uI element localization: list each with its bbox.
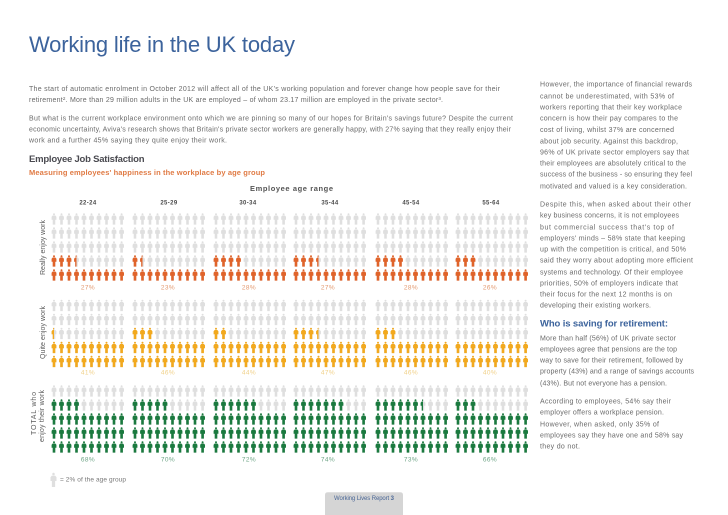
age range labels: 22-24 bbox=[79, 200, 97, 206]
right column: financial rewards text: their employees are absolutely critical to the bbox=[540, 160, 686, 167]
pictogram: quite enjoy work 30-34: 44% bbox=[242, 370, 256, 376]
right column: saving text: (43%). But not everyone has a pension. bbox=[540, 381, 667, 388]
pictogram: total who enjoy work 35-44: 74% bbox=[321, 456, 335, 464]
row label: total who enjoy their work bbox=[31, 390, 46, 442]
age range labels: 30-34 bbox=[239, 200, 257, 206]
right column: financial rewards text: cannot be underestimated, with 53% of bbox=[540, 93, 674, 100]
intro text block: But what is the current workplace environment onto which we are pinning so many of our hopes for Britain's savings future? Despite the current bbox=[29, 116, 513, 122]
chart heading: Employee Job Satisfaction bbox=[29, 154, 145, 165]
pictogram: total who enjoy work 25-29: 70% bbox=[161, 456, 175, 464]
pictogram: quite enjoy work 35-44 bbox=[294, 300, 366, 376]
pictogram: really enjoy work 25-29: 23% bbox=[161, 284, 175, 292]
pictogram: quite enjoy work 45-54 bbox=[376, 300, 448, 376]
right column: financial rewards text: However, the importance of financial rewards bbox=[540, 82, 692, 89]
legend bbox=[50, 473, 126, 487]
pictogram: really enjoy work 55-64: 26% bbox=[483, 284, 497, 292]
right column: business concerns text: priorities, 50% of employers indicate that bbox=[540, 281, 678, 288]
pictogram: quite enjoy work 55-64: 40% bbox=[483, 370, 497, 376]
axis title: employee age range: Employee age range bbox=[250, 184, 333, 193]
right column: business concerns text: but commercial success that's top of bbox=[540, 224, 674, 231]
right column: pension text: According to employees, 54% say their bbox=[540, 399, 672, 406]
right column: saving text: More than half (56%) of UK private sector bbox=[540, 336, 677, 343]
right column: financial rewards text bbox=[539, 82, 692, 190]
intro text block: retirement². More than 29 million adults in the UK are employed – of whom 23.17 million are employed in the private sector³. bbox=[29, 97, 443, 104]
pictogram: total who enjoy work 55-64: 66% bbox=[483, 456, 497, 464]
right column heading: who is saving for retirement: Who is saving for retirement: bbox=[540, 318, 668, 329]
right column: business concerns text bbox=[540, 202, 693, 310]
pictogram: total who enjoy work 35-44 bbox=[294, 385, 366, 464]
right column: saving text: property (43%) and a range of savings accounts bbox=[540, 369, 694, 376]
right column: pension text: they do not. bbox=[540, 444, 580, 451]
right column: business concerns text: their focus for the next 12 months is on bbox=[540, 292, 672, 299]
footer tab bbox=[325, 492, 403, 515]
right column: saving text: way to save for their retirement, followed by bbox=[539, 358, 684, 365]
right column: pension text: employees say they have one and 58% say bbox=[540, 433, 684, 440]
age range labels: 45-54 bbox=[402, 200, 420, 206]
pictogram: really enjoy work 22-24 bbox=[52, 213, 124, 292]
right column: financial rewards text: 96% of UK private sector employers say that bbox=[540, 149, 689, 156]
pictogram: quite enjoy work 55-64 bbox=[456, 300, 528, 376]
pictogram: quite enjoy work 45-54: 46% bbox=[404, 370, 418, 376]
pictogram: total who enjoy work 55-64 bbox=[456, 385, 528, 464]
right column: business concerns text: Despite this, when asked about their other bbox=[540, 202, 692, 209]
pictogram: really enjoy work 25-29 bbox=[133, 213, 205, 292]
age range labels: 35-44 bbox=[321, 200, 339, 206]
pictogram: total who enjoy work 22-24: 68% bbox=[81, 456, 95, 464]
right column: financial rewards text: motivated and valued is a key consideration. bbox=[540, 183, 687, 190]
pictogram: really enjoy work 55-64 bbox=[456, 213, 528, 292]
row label: total who enjoy their work: enjoy their work bbox=[39, 390, 46, 442]
right column: financial rewards text: cost of living, whilst 37% are concerned bbox=[540, 127, 674, 134]
pictogram: quite enjoy work 35-44: 47% bbox=[321, 370, 335, 376]
intro text block: The start of automatic enrolment in October 2012 will affect all of the UK's working population and forever change how people save for their bbox=[29, 86, 501, 93]
pictogram: quite enjoy work 22-24 bbox=[52, 300, 124, 376]
pictogram: total who enjoy work 22-24 bbox=[52, 385, 124, 464]
age range labels bbox=[79, 200, 500, 206]
title: Working life in the UK today bbox=[29, 32, 295, 57]
pictogram: quite enjoy work 25-29 bbox=[133, 300, 205, 376]
right column: financial rewards text: success of the business - so ensuring they feel bbox=[540, 172, 692, 179]
right column: financial rewards text: concern is how their pay compares to the bbox=[540, 116, 678, 123]
right column: business concerns text: developing their existing workers. bbox=[540, 303, 651, 310]
row label: total who enjoy their work: TOTAL who bbox=[31, 392, 38, 435]
pictogram: really enjoy work 35-44 bbox=[294, 213, 366, 292]
footer tab: Working Lives Report 3 bbox=[334, 496, 395, 502]
pictogram: quite enjoy work 25-29: 46% bbox=[161, 370, 175, 376]
chart subheading: Measuring employees' happiness in the workplace by age group bbox=[29, 168, 265, 177]
right column: business concerns text: key business concerns, it is not employees bbox=[540, 213, 680, 220]
pictogram: really enjoy work 35-44: 27% bbox=[321, 284, 335, 292]
right column: saving text bbox=[539, 336, 694, 388]
pictogram: really enjoy work 45-54 bbox=[376, 213, 448, 292]
right column: pension text: However, when asked, only 35% of bbox=[540, 422, 659, 429]
age range labels: 25-29 bbox=[160, 200, 178, 206]
pictogram: quite enjoy work 22-24: 41% bbox=[81, 370, 95, 376]
pictogram: total who enjoy work 45-54: 73% bbox=[404, 456, 418, 464]
right column: financial rewards text: workers reporting that their key workplace bbox=[539, 105, 682, 112]
right column: saving text: employees agree that pensions are the top bbox=[540, 347, 677, 354]
legend: = 2% of the age group bbox=[60, 477, 126, 484]
right column: financial rewards text: about job security. Against this backdrop, bbox=[540, 138, 678, 145]
right column: business concerns text: said they worry about adopting more efficient bbox=[540, 258, 693, 265]
pictogram: total who enjoy work 25-29 bbox=[133, 385, 205, 464]
row label: really enjoy work: Really enjoy work bbox=[40, 220, 47, 275]
pictogram: really enjoy work 30-34 bbox=[214, 213, 286, 292]
pictogram: total who enjoy work 30-34: 72% bbox=[242, 456, 256, 464]
right column: business concerns text: employers' minds – 58% state that keeping bbox=[540, 236, 685, 243]
pictogram: really enjoy work 22-24: 27% bbox=[81, 284, 95, 292]
intro text block: work and a further 45% saying they quite enjoy their work. bbox=[28, 138, 227, 144]
intro text block: economic uncertainty, Aviva's research shows that Britain's private sector workers are generally happy, with 27% saying that they really enjoy their bbox=[29, 126, 512, 134]
pictogram: total who enjoy work 30-34 bbox=[214, 385, 286, 464]
intro text block bbox=[28, 86, 513, 144]
pictogram: really enjoy work 30-34: 28% bbox=[242, 284, 256, 292]
right column: business concerns text: systems and technology. Of their employee bbox=[540, 269, 683, 276]
right column: business concerns text: up with the competition is critical, and 50% bbox=[540, 246, 686, 253]
pictogram: really enjoy work 45-54: 28% bbox=[404, 284, 418, 292]
age range labels: 55-64 bbox=[482, 200, 500, 206]
pictogram: total who enjoy work 45-54 bbox=[376, 385, 448, 464]
right column: pension text: employer offers a workplace pension. bbox=[540, 410, 664, 417]
row label: quite enjoy work: Quite enjoy work bbox=[40, 306, 47, 359]
right column: pension text bbox=[540, 399, 684, 451]
pictogram: quite enjoy work 30-34 bbox=[214, 300, 286, 376]
